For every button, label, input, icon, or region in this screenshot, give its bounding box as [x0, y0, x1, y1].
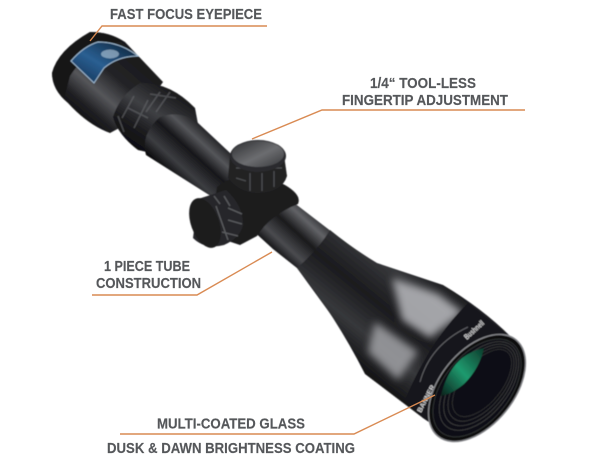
turret cap [230, 140, 286, 172]
bell highlight lower [368, 322, 418, 380]
callout: fast focus eyepiece [90, 7, 267, 41]
riflescope [52, 32, 545, 459]
callout: multi-coated glass [107, 395, 435, 457]
magnification ring [113, 83, 198, 155]
label: FAST FOCUS EYEPIECE [110, 7, 262, 23]
windage knob [183, 190, 243, 252]
scope tube: rear section [145, 114, 245, 200]
label [342, 76, 508, 109]
leader line [92, 252, 272, 295]
objective bell [297, 230, 524, 438]
green coated glass [441, 348, 484, 396]
scope tube: front section to objective [250, 192, 372, 327]
label: DUSK & DAWN BRIGHTNESS COATING [107, 441, 355, 457]
leader line [120, 395, 435, 434]
label: 1/4“ TOOL-LESS [370, 76, 476, 92]
elevation turret [228, 140, 287, 193]
turret saddle [210, 175, 299, 245]
callout: fingertip adjustment [252, 76, 525, 139]
leader line [90, 26, 267, 41]
label: 1 PIECE TUBE [104, 259, 190, 275]
blue eyepiece label [71, 42, 138, 83]
eyepiece end ring [52, 32, 122, 98]
label: MULTI-COATED GLASS [157, 416, 305, 432]
bell dark end [405, 303, 524, 438]
bell highlight upper [392, 278, 462, 338]
bell seam [420, 327, 468, 382]
leader line [252, 110, 525, 139]
label [107, 416, 355, 457]
label: CONSTRUCTION [96, 276, 201, 292]
objective rim and lens [409, 317, 545, 459]
callout: one piece tube [92, 252, 272, 295]
label: FINGERTIP ADJUSTMENT [342, 93, 508, 109]
eyepiece body [52, 32, 163, 133]
label [96, 259, 201, 292]
brand text on bell: Bushnell [462, 319, 486, 341]
model text on bell: BANNER [417, 384, 437, 414]
